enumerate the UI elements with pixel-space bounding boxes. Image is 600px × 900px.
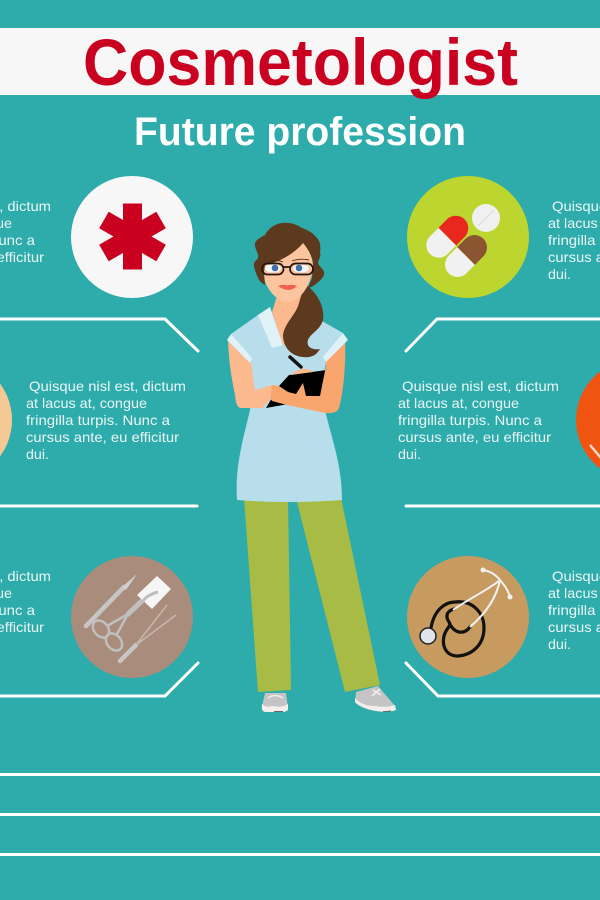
tweezers: [120, 645, 136, 661]
face: [263, 240, 314, 302]
clipboard: [266, 368, 342, 408]
icon: peach circle: [0, 359, 12, 481]
sleeve trims: [227, 333, 348, 363]
icon: orange circle: [576, 359, 600, 481]
left arm: [228, 340, 272, 408]
text block: middle right: dui.: [398, 446, 421, 462]
gauze: [137, 576, 171, 609]
text block: bottom right: dui.: [548, 636, 571, 652]
text block: top left: [0, 198, 51, 265]
shoes: [262, 686, 396, 712]
icon: surgical tools: [71, 556, 193, 678]
text block: middle left: Quisque nisl est, dictum: [29, 378, 186, 394]
figure: cosmetologist: [227, 223, 396, 712]
hair tail: [283, 284, 323, 357]
text block: middle right: cursus ante, eu efficitur: [398, 429, 551, 445]
neck and chest: [272, 294, 306, 346]
text block: middle left: [26, 378, 186, 462]
scissors: [90, 597, 146, 654]
connector lines: [0, 319, 600, 696]
tunic: [231, 307, 343, 502]
text block: bottom right: [548, 568, 600, 652]
text block: middle left: at lacus at, congue: [26, 395, 147, 411]
hair: [254, 223, 324, 288]
text block: middle left: fringilla turpis. Nunc a: [26, 412, 170, 428]
right arm: [270, 338, 345, 413]
title: Cosmetologist: [83, 25, 518, 99]
collar: [258, 307, 283, 348]
legs: [244, 498, 380, 692]
scalpel: [86, 587, 124, 626]
pen: [290, 357, 301, 367]
text block: top right: [548, 198, 600, 282]
text block: middle right: fringilla turpis. Nunc a: [398, 412, 542, 428]
subtitle: Future profession: [134, 110, 466, 154]
text block: middle left: dui.: [26, 446, 49, 462]
icon: stethoscope: [407, 556, 529, 678]
icon: medical asterisk: [71, 176, 193, 298]
writing hand: [291, 369, 313, 375]
text block: middle right: at lacus at, congue: [398, 395, 519, 411]
glasses: [262, 259, 313, 274]
text block: middle right: Quisque nisl est, dictum: [402, 378, 559, 394]
footer lines: [0, 773, 600, 856]
text block: middle right: [398, 378, 559, 462]
text block: middle left: cursus ante, eu efficitur: [26, 429, 179, 445]
icon: pills: [407, 176, 529, 298]
text block: bottom left: [0, 568, 51, 635]
text block: top right: dui.: [548, 266, 571, 282]
title band: [0, 25, 600, 99]
lips: [278, 285, 297, 290]
